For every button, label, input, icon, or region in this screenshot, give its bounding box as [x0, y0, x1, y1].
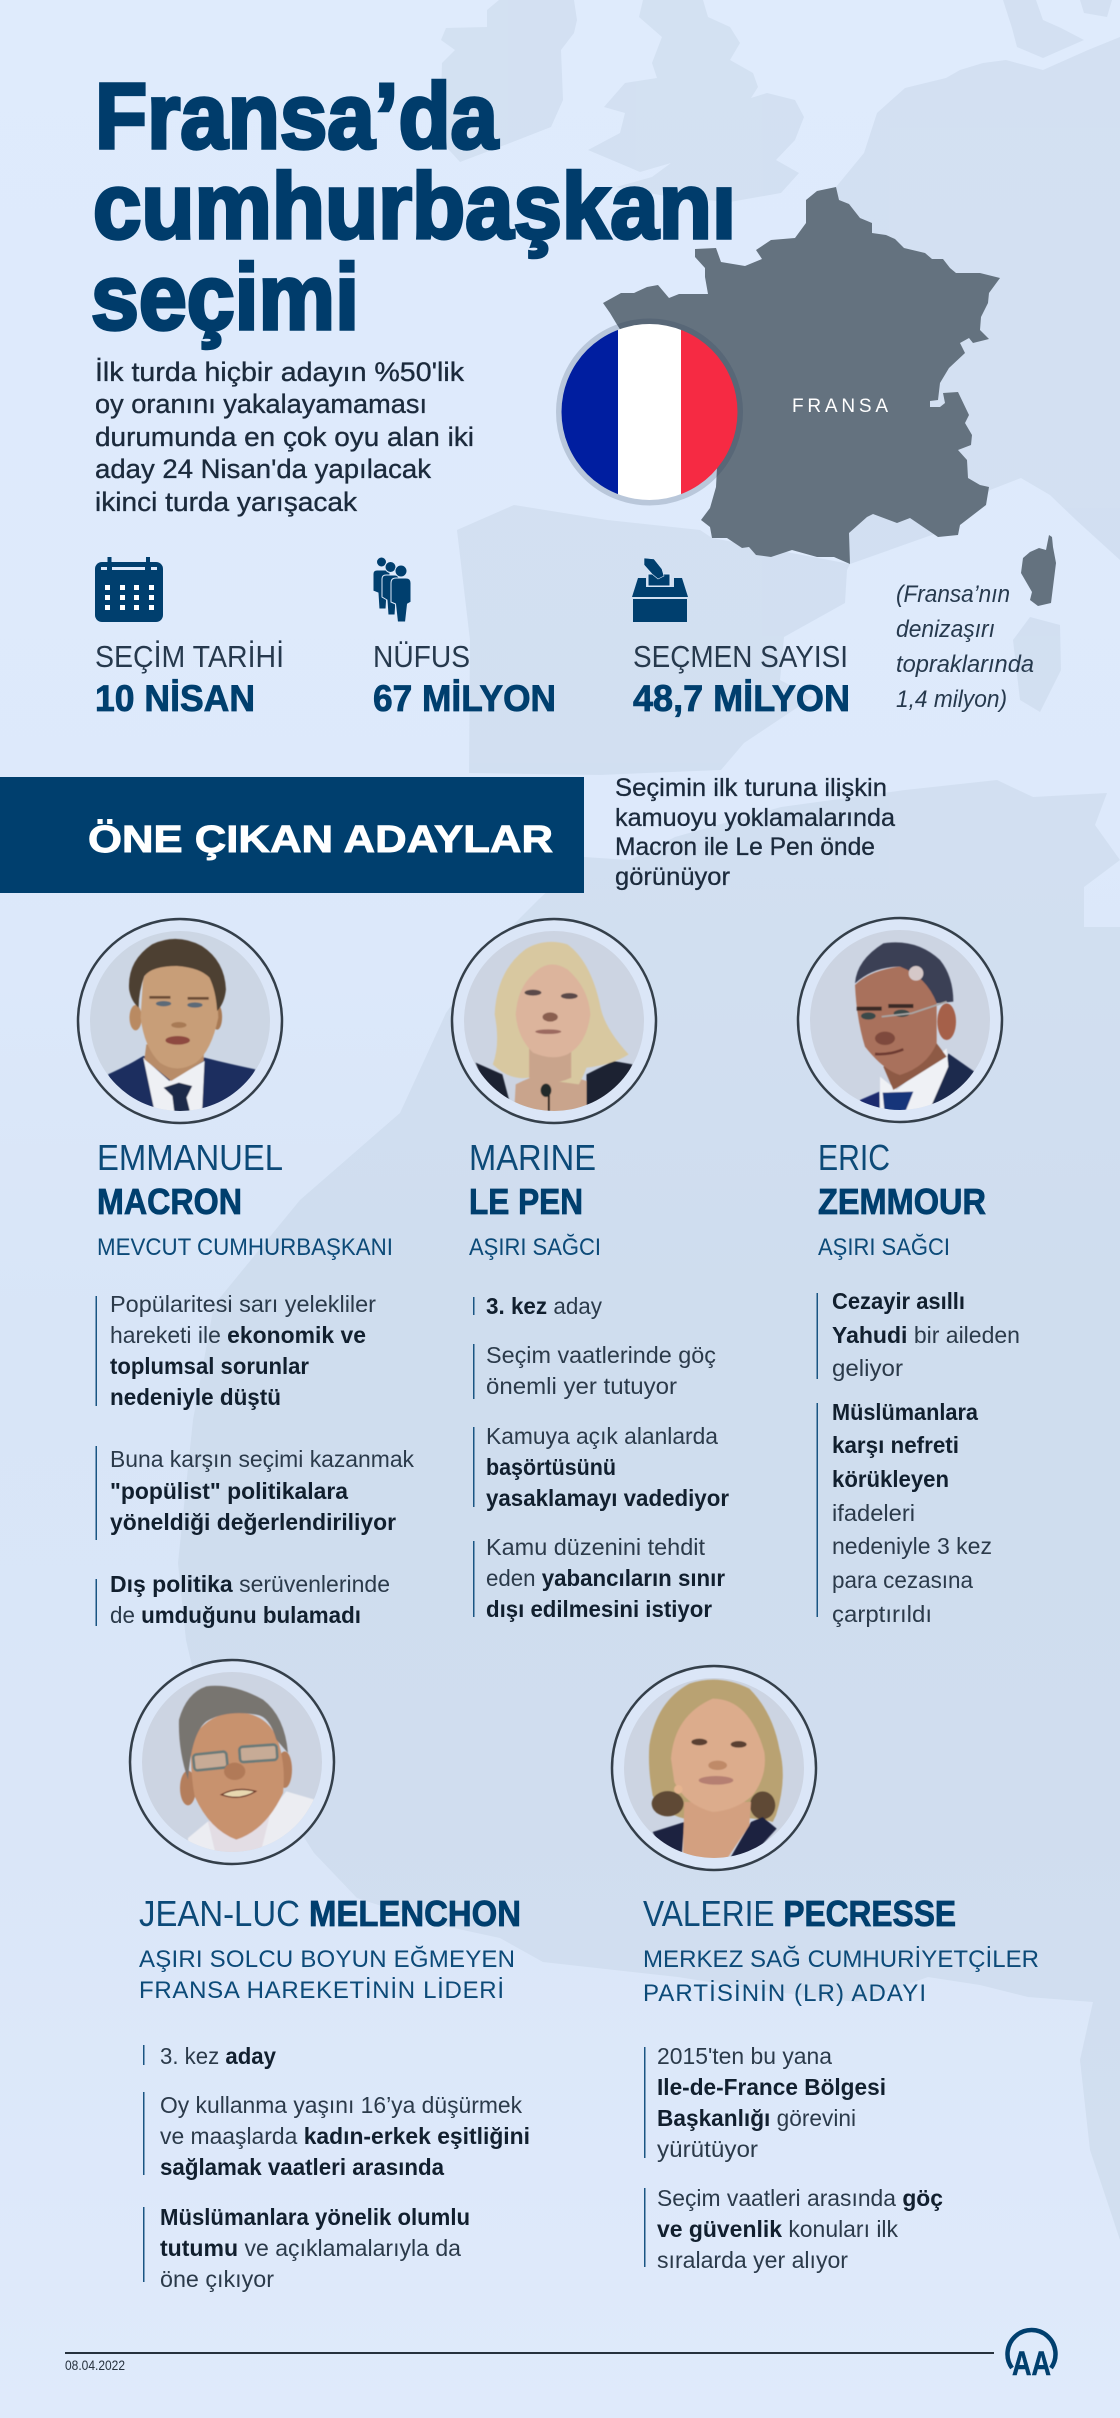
bullets: Macron: hareketi ile ekonomik ve	[110, 1322, 366, 1348]
title: seçimi	[91, 245, 359, 349]
candidate: Le Pen name: LE PEN	[469, 1181, 583, 1222]
intro text: İlk turda hiçbir adayın %50'lik	[95, 356, 465, 387]
bullets: Melenchon: ve maaşlarda kadın-erkek eşitliğini	[160, 2123, 530, 2149]
candidate: Melenchon name: FRANSA HAREKETİNİN LİDERİ	[139, 1977, 504, 2004]
bullets: Le Pen: eden yabancıların sınır	[486, 1565, 725, 1591]
stat: population: 67 MİLYON	[373, 678, 556, 719]
bullets: Macron: Buna karşın seçimi kazanmak	[110, 1446, 414, 1472]
bullets: Pecresse: ve güvenlik konuları ilk	[657, 2216, 898, 2242]
candidate: Pecresse name: PARTİSİNİN (LR) ADAYI	[643, 1980, 926, 2007]
bullets: Zemmour: ifadeleri	[832, 1500, 915, 1526]
stat: election date: SEÇİM TARİHİ	[95, 639, 284, 674]
stat: voters: 48,7 MİLYON	[633, 678, 850, 719]
candidate: Zemmour name: ERIC	[818, 1137, 890, 1178]
date: 08.04.2022	[65, 2357, 125, 2373]
icon: ballot box	[632, 558, 688, 622]
candidate: Zemmour name: ZEMMOUR	[818, 1181, 986, 1222]
bullets: Zemmour: para cezasına	[832, 1567, 973, 1593]
bullets: Pecresse: 2015'ten bu yana	[657, 2043, 832, 2069]
bullets: Zemmour: Müslümanlara	[832, 1399, 978, 1425]
portrait: Pecresse	[612, 1666, 816, 1870]
stat: population	[373, 639, 556, 719]
intro text	[95, 356, 474, 517]
candidate: Le Pen name: AŞIRI SAĞCI	[469, 1234, 601, 1261]
portrait: Macron	[78, 919, 282, 1123]
banner note: görünüyor	[615, 863, 730, 891]
bullets: Le Pen	[473, 1293, 729, 1622]
bullets: Zemmour: Cezayir asıllı	[832, 1288, 965, 1314]
banner note: Macron ile Le Pen önde	[615, 833, 875, 861]
section banner: ÖNE ÇIKAN ADAYLAR	[88, 818, 553, 861]
candidate: Macron name	[97, 1137, 393, 1261]
bullets: Le Pen: önemli yer tutuyor	[486, 1373, 677, 1399]
bullets: Melenchon: Oy kullanma yaşını 16’ya düşürmek	[160, 2092, 522, 2118]
bullets: Zemmour: geliyor	[832, 1355, 903, 1381]
bullets: Macron	[96, 1291, 414, 1628]
icon: people	[373, 557, 411, 622]
note: overseas territories: denizaşırı	[896, 616, 995, 643]
icon: calendar	[95, 557, 163, 622]
bullets: Zemmour: karşı nefreti	[832, 1432, 959, 1458]
candidate: Macron name: EMMANUEL	[97, 1137, 283, 1178]
portrait: Zemmour	[798, 918, 1002, 1122]
map: France	[603, 187, 1000, 564]
stat: voters: SEÇMEN SAYISI	[633, 639, 848, 674]
logo: Anadolu Agency	[1007, 2330, 1056, 2383]
candidate: Pecresse name	[643, 1893, 1039, 2007]
bullets: Pecresse: yürütüyor	[657, 2136, 758, 2162]
section banner	[0, 777, 584, 893]
title: cumhurbaşkanı	[93, 154, 736, 258]
bullets: Melenchon: öne çıkıyor	[160, 2266, 274, 2292]
bullets: Macron: Popülaritesi sarı yelekliler	[110, 1291, 376, 1317]
bullets: Zemmour: çarptırıldı	[832, 1601, 932, 1627]
note: overseas territories: topraklarında	[896, 651, 1034, 678]
bullets: Melenchon: tutumu ve açıklamalarıyla da	[160, 2235, 461, 2261]
bullets: Zemmour: Yahudi bir aileden	[832, 1322, 1020, 1348]
candidate: Le Pen name	[469, 1137, 601, 1261]
bullets: Le Pen: Kamuya açık alanlarda	[486, 1423, 718, 1449]
bullets: Pecresse	[644, 2043, 943, 2273]
banner note: Seçimin ilk turuna ilişkin	[615, 774, 887, 802]
bullets: Pecresse: Başkanlığı görevini	[657, 2105, 856, 2131]
portrait: Le Pen	[452, 919, 656, 1123]
title	[91, 64, 736, 349]
note: overseas territories	[896, 581, 1034, 713]
intro text: ikinci turda yarışacak	[95, 487, 358, 517]
bullets: Macron: toplumsal sorunlar	[110, 1353, 309, 1379]
bullets: Macron: "popülist" politikalara	[110, 1478, 348, 1504]
candidate: Zemmour name	[818, 1137, 986, 1261]
bullets: Macron: yöneldiği değerlendiriliyor	[110, 1509, 396, 1535]
note: overseas territories: (Fransa’nın	[896, 581, 1010, 608]
candidate: Pecresse name: VALERIE PECRESSE	[643, 1893, 956, 1934]
stat: election date	[95, 639, 284, 719]
candidate: Melenchon name: JEAN-LUC MELENCHON	[139, 1893, 521, 1934]
bullets: Macron: nedeniyle düştü	[110, 1384, 281, 1410]
banner note: kamuoyu yoklamalarında	[615, 804, 895, 832]
bullets: Melenchon: 3. kez aday	[160, 2043, 276, 2069]
logo: Anadolu Agency: AA	[1012, 2345, 1051, 2383]
candidate: Macron name: MACRON	[97, 1181, 242, 1222]
candidate: Le Pen name: MARINE	[469, 1137, 596, 1178]
bullets: Melenchon: Müslümanlara yönelik olumlu	[160, 2204, 470, 2230]
bullets: Zemmour: körükleyen	[832, 1466, 949, 1492]
bullets: Pecresse: Ile-de-France Bölgesi	[657, 2074, 886, 2100]
label: Fransa: FRANSA	[792, 396, 888, 417]
intro text: aday 24 Nisan'da yapılacak	[95, 454, 432, 484]
intro text: durumunda en çok oyu alan iki	[95, 422, 474, 452]
bullets: Le Pen: yasaklamayı vadediyor	[486, 1485, 729, 1511]
bullets: Le Pen: Kamu düzenini tehdit	[486, 1534, 706, 1560]
banner note	[615, 774, 895, 891]
bullets: Melenchon	[143, 2043, 530, 2292]
bullets: Zemmour: nedeniyle 3 kez	[832, 1533, 992, 1559]
bullets: Le Pen: 3. kez aday	[486, 1293, 602, 1319]
bullets: Le Pen: başörtüsünü	[486, 1454, 616, 1480]
candidate: Melenchon name: AŞIRI SOLCU BOYUN EĞMEYEN	[139, 1946, 515, 1973]
map: Corsica	[1021, 535, 1056, 606]
candidate: Pecresse name: MERKEZ SAĞ CUMHURİYETÇİLER	[643, 1946, 1039, 1973]
bullets: Le Pen: dışı edilmesini istiyor	[486, 1596, 712, 1622]
icon: French flag	[559, 320, 741, 504]
bullets: Macron: Dış politika serüvenlerinde	[110, 1571, 390, 1597]
candidate: Macron name: MEVCUT CUMHURBAŞKANI	[97, 1234, 393, 1261]
bullets: Pecresse: Seçim vaatleri arasında göç	[657, 2185, 943, 2211]
note: overseas territories: 1,4 milyon)	[896, 686, 1007, 713]
intro text: oy oranını yakalayamaması	[95, 389, 427, 419]
bullets: Melenchon: sağlamak vaatleri arasında	[160, 2154, 444, 2180]
bullets: Pecresse: sıralarda yer alıyor	[657, 2247, 848, 2273]
candidate: Melenchon name	[139, 1893, 521, 2004]
portrait: Melenchon	[130, 1660, 334, 1864]
stat: population: NÜFUS	[373, 639, 470, 674]
stat: voters	[633, 639, 850, 719]
bullets: Zemmour	[816, 1288, 1020, 1627]
candidate: Zemmour name: AŞIRI SAĞCI	[818, 1234, 950, 1261]
title: Fransa’da	[95, 64, 499, 168]
stat: election date: 10 NİSAN	[95, 678, 255, 719]
bullets: Macron: de umduğunu bulamadı	[110, 1602, 361, 1628]
bullets: Le Pen: Seçim vaatlerinde göç	[486, 1342, 716, 1368]
